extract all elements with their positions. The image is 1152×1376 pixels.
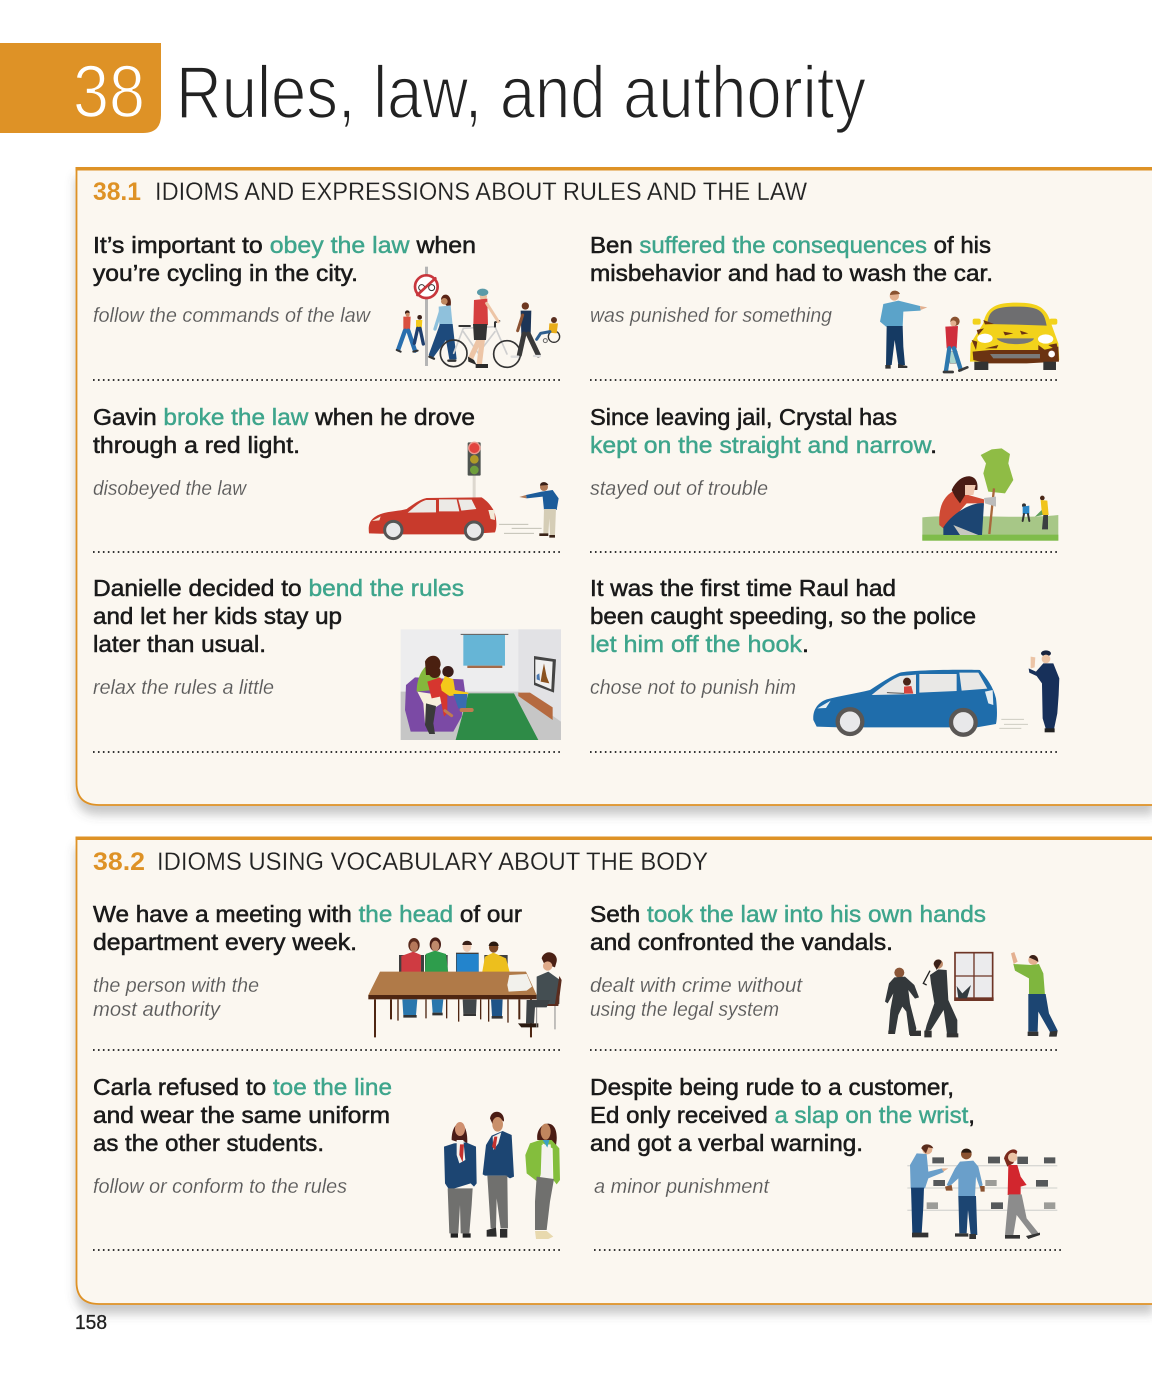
item: let him off the hook: chose not to punish him bbox=[590, 677, 796, 699]
item: bend the rules: Danielle decided to bend the rules bbox=[93, 575, 464, 601]
illustration: customer, clerk and shopper in a camera store bbox=[907, 1144, 1057, 1239]
item: kept on the straight and narrow: kept on the straight and narrow . bbox=[590, 432, 937, 458]
title: Rules, law, and authority bbox=[176, 51, 866, 134]
item: kept on the straight and narrow: Since leaving jail, Crystal has bbox=[590, 404, 897, 430]
illustration: man pointing, boy with bucket, dirty yellow car bbox=[880, 291, 1059, 372]
item: toe the line: Carla refused to toe the line bbox=[93, 1074, 392, 1100]
item: took the law into his own hands bbox=[590, 901, 1059, 1050]
item: obey the law: It’s important to obey the law when bbox=[93, 232, 476, 258]
item: bend the rules: later than usual. bbox=[93, 631, 266, 657]
illustration: blue car stopped by a police officer bbox=[813, 650, 1059, 735]
item: obey the law bbox=[93, 232, 561, 380]
item: took the law into his own hands: Seth took the law into his own hands bbox=[590, 901, 986, 927]
illustration: meeting around a table bbox=[368, 937, 562, 1037]
item: toe the line: follow or conform to the rules bbox=[93, 1176, 347, 1198]
item: kept on the straight and narrow: stayed out of trouble bbox=[590, 478, 768, 500]
item: suffered the consequences bbox=[590, 232, 1059, 380]
panel: 38.1 idioms about rules and the law bbox=[76, 167, 1152, 805]
item: bend the rules: and let her kids stay up bbox=[93, 603, 342, 629]
section heading 38.1: 38.1 bbox=[93, 178, 141, 206]
illustration: three students in uniform bbox=[444, 1112, 560, 1239]
item: suffered the consequences: was punished for something bbox=[590, 305, 832, 327]
illustration: family watching TV in a living room bbox=[401, 629, 561, 740]
section heading 38.2: 38.2 bbox=[93, 848, 145, 876]
item: let him off the hook: been caught speeding, so the police bbox=[590, 603, 976, 629]
illustration: red car passing red light, man pointing bbox=[369, 442, 559, 539]
item: took the law into his own hands: using the legal system bbox=[590, 999, 779, 1021]
item: the head: department every week. bbox=[93, 929, 357, 955]
chapter number tab: 38 bbox=[73, 50, 145, 133]
panel: 38.2 idioms using vocabulary about the body bbox=[76, 836, 1152, 1304]
item: let him off the hook: It was the first time Raul had bbox=[590, 575, 896, 601]
item: let him off the hook: let him off the hook . bbox=[590, 631, 809, 657]
illustration: people walking and cycling by a no-cycling sign bbox=[397, 267, 560, 368]
item: toe the line: as the other students. bbox=[93, 1130, 324, 1156]
item: obey the law: you’re cycling in the city. bbox=[93, 260, 358, 286]
item: a slap on the wrist: Despite being rude to a customer, bbox=[590, 1074, 954, 1100]
section heading 38.2: IDIOMS USING VOCABULARY ABOUT THE BODY bbox=[157, 848, 708, 876]
item: took the law into his own hands: dealt with crime without bbox=[590, 975, 803, 997]
item: a slap on the wrist: Ed only received a slap on the wrist, bbox=[590, 1102, 975, 1128]
item: the head: We have a meeting with the head of our bbox=[93, 901, 522, 927]
item: a slap on the wrist: and got a verbal warning. bbox=[590, 1130, 863, 1156]
item: broke the law bbox=[93, 404, 561, 552]
item: obey the law: follow the commands of the law bbox=[93, 305, 372, 327]
item: broke the law: through a red light. bbox=[93, 432, 300, 458]
section heading 38.1: IDIOMS AND EXPRESSIONS ABOUT RULES AND THE LAW bbox=[155, 178, 807, 206]
item: kept on the straight and narrow bbox=[590, 404, 1059, 552]
item: the head: most authority bbox=[93, 999, 221, 1021]
illustration: woman planting a tree bbox=[922, 448, 1058, 541]
item: bend the rules bbox=[93, 575, 561, 752]
item: suffered the consequences: misbehavior and had to wash the car. bbox=[590, 260, 993, 286]
illustration: man confronting two vandals by a broken window bbox=[885, 952, 1058, 1037]
item: broke the law: disobeyed the law bbox=[93, 478, 247, 500]
item: suffered the consequences: Ben suffered the consequences of his bbox=[590, 232, 991, 258]
item: toe the line bbox=[93, 1074, 561, 1250]
item: a slap on the wrist: a minor punishment bbox=[594, 1176, 770, 1198]
item: a slap on the wrist bbox=[590, 1074, 1062, 1250]
item: took the law into his own hands: and confronted the vandals. bbox=[590, 929, 893, 955]
item: toe the line: and wear the same uniform bbox=[93, 1102, 390, 1128]
item: broke the law: Gavin broke the law when he drove bbox=[93, 404, 475, 430]
item: let him off the hook bbox=[590, 575, 1059, 752]
chapter number tab bbox=[0, 43, 161, 133]
item: the head: the person with the bbox=[93, 975, 259, 997]
item: bend the rules: relax the rules a little bbox=[93, 677, 274, 699]
item: the head bbox=[93, 901, 562, 1050]
page number: 158 bbox=[75, 1312, 107, 1334]
